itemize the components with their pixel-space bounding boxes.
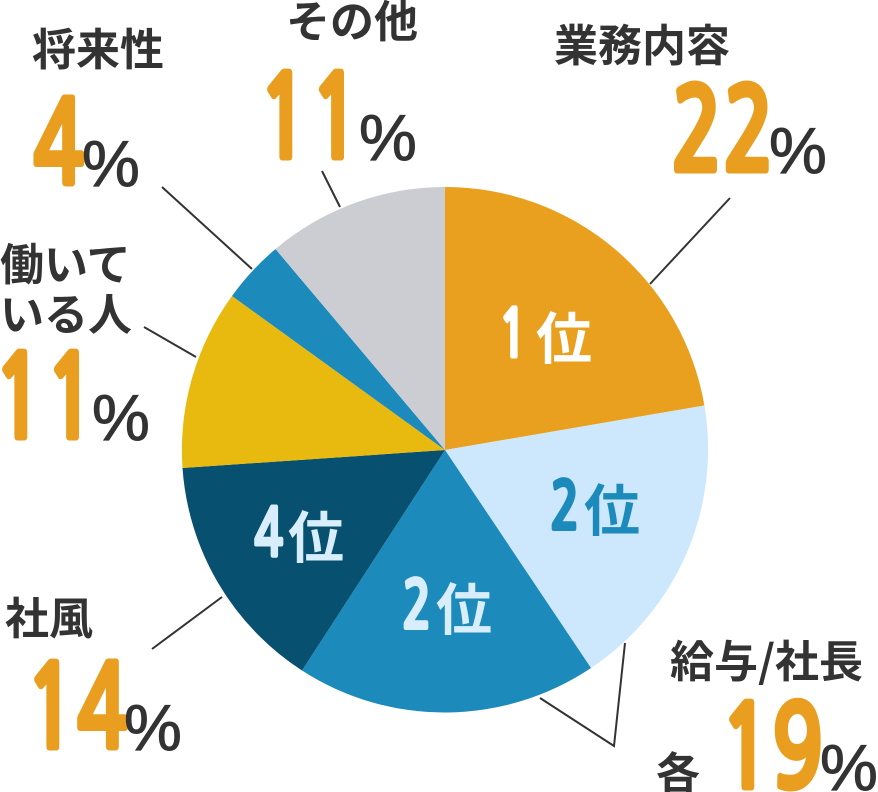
rank label: 2位 blue slice: 位	[436, 566, 492, 647]
callout: 業務内容 22%: %	[769, 114, 827, 187]
leader line: 給与/社長	[540, 643, 625, 746]
rank label: 2位 light slice: 2	[550, 473, 580, 539]
slice: 働いている人 11%	[182, 296, 445, 468]
pie chart	[182, 187, 708, 713]
callout: 働いている人 11%	[0, 229, 150, 456]
slice: 給与 19%	[445, 406, 708, 668]
callout: 働いている人 11%: いる人	[0, 279, 132, 343]
callout: 社風 14%	[5, 583, 182, 766]
rank label: 2位 blue slice	[402, 566, 492, 647]
callout: 社風 14%: %	[124, 691, 182, 764]
callout: 給与/社長 各19%	[656, 626, 878, 792]
rank label: 2位 blue slice: 2	[402, 572, 432, 638]
callout: 社風 14%: 社風	[5, 583, 93, 647]
callout: 給与/社長 各19%: 給与/社長	[670, 626, 863, 690]
slice: その他 11%	[276, 187, 445, 450]
rank label: 4位: 位	[288, 494, 344, 575]
callout: 将来性 4%	[32, 14, 164, 202]
slice: 社風 14%	[182, 450, 445, 670]
leader line: 働いている人	[144, 327, 196, 357]
leader line: 社風	[152, 597, 222, 649]
rank label: 1位	[498, 295, 592, 376]
slice: 将来性 4%	[232, 249, 445, 450]
callout: 将来性 4%: %	[82, 127, 140, 200]
callout: 業務内容 22%: 業務内容	[554, 10, 730, 74]
callout: 将来性 4%: 4	[33, 88, 85, 202]
rank label: 1位: 位	[536, 295, 592, 376]
slice: 業務内容 22%	[445, 187, 704, 450]
rank label: 1位: 1	[498, 301, 528, 367]
callout: 働いている人 11%: %	[92, 381, 150, 454]
callout: 将来性 4%: 将来性	[32, 14, 164, 78]
leader line: 将来性	[162, 187, 252, 269]
leader line: 業務内容	[650, 198, 730, 284]
rank label: 2位 light slice	[550, 467, 640, 548]
leader line: その他	[322, 171, 340, 207]
callout: 業務内容 22%: 22	[671, 75, 775, 189]
callout: その他 11%: %	[359, 101, 417, 174]
rank label: 4位	[254, 494, 344, 575]
callout: その他 11%	[258, 0, 418, 176]
rank label: 2位 light slice: 位	[584, 467, 640, 548]
callout: その他 11%: 11	[258, 62, 362, 176]
slice: 社長 19%	[302, 450, 591, 713]
callout: 社風 14%: 14	[25, 652, 129, 766]
callout: 業務内容 22%	[554, 10, 827, 189]
callout: 働いている人 11%: 働いて	[0, 229, 131, 293]
rank label: 4位: 4	[254, 500, 284, 566]
